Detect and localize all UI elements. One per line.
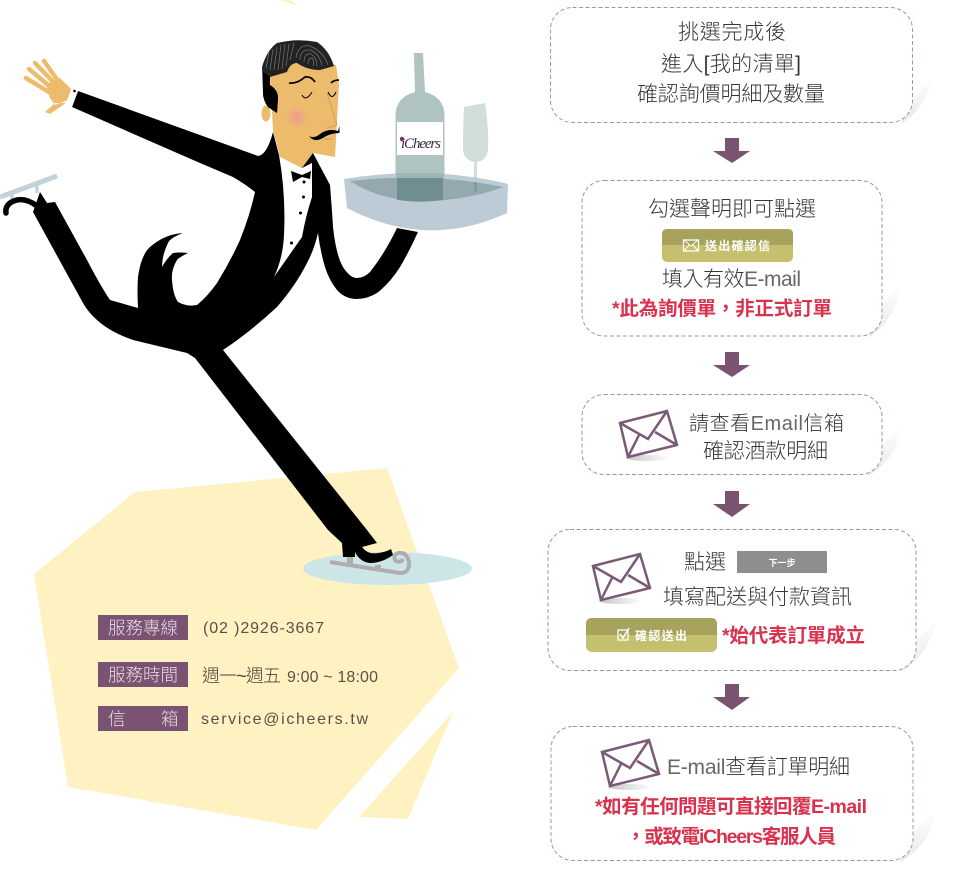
- contact: hotline: (02 )2926-3667: [203, 620, 324, 637]
- button: confirm and send: [586, 618, 717, 652]
- arrow 3: [713, 491, 750, 517]
- contact: hotline: 服務專線: [108, 618, 178, 638]
- panel 4: delivery and payment: [548, 530, 936, 672]
- button: send confirmation letter: [662, 229, 793, 262]
- contact: service hours: 服務時間: [108, 665, 178, 685]
- arrow 1: [713, 138, 750, 163]
- ice patch: [303, 552, 472, 585]
- panel 1: review list: 挑選完成後: [678, 21, 786, 44]
- bottle and glass behind tray: iCheers: [401, 136, 441, 152]
- panel 4: delivery and payment: 點選: [684, 551, 726, 574]
- button: send confirmation letter: 送出確認信: [705, 238, 770, 253]
- button: next step: [737, 551, 827, 573]
- panel 2: confirmation letter: 勾選聲明即可點選: [648, 198, 816, 221]
- button: confirm and send: 確認送出: [635, 628, 687, 643]
- hand and cuff: [26, 61, 78, 114]
- panel 5: order details: E-mail查看訂單明細: [667, 756, 850, 779]
- panel 3: check email: [582, 394, 902, 476]
- panel 5: order details: [551, 726, 936, 862]
- back skate: [0, 176, 57, 201]
- shirt: [274, 155, 312, 277]
- panel 4: delivery and payment: *始代表訂單成立: [722, 624, 865, 647]
- contact: email: 信: [108, 709, 126, 729]
- panel 3: check email: 請查看Email信箱: [689, 412, 844, 435]
- panel 1: review list: 確認詢價明細及數量: [637, 83, 825, 106]
- arrow 4: [713, 684, 750, 710]
- panel 5: order details: *如有任何問題可直接回覆E-mail: [595, 796, 867, 818]
- contact: service hours: [98, 662, 378, 687]
- contact: service hours: 9:00 ~ 18:00: [287, 669, 378, 686]
- bow tie and buttons: [290, 171, 311, 244]
- tray: [344, 173, 508, 230]
- button: next step: 下一步: [768, 557, 796, 568]
- icon: envelope: [593, 554, 650, 604]
- icon: envelope: [602, 740, 659, 790]
- contact: email: [98, 706, 368, 731]
- illustration: waiter on skates: [0, 40, 508, 573]
- panel 1: review list: 進入[我的清單]: [661, 53, 801, 76]
- bottle and glass behind tray: [396, 53, 488, 200]
- yellow background shape: [34, 0, 459, 830]
- front skate: [330, 553, 409, 573]
- panel 4: delivery and payment: 填寫配送與付款資訊: [663, 586, 852, 609]
- panel 2: confirmation letter: *此為詢價單，非正式訂單: [612, 297, 832, 320]
- panel 2: confirmation letter: 填入有效E-mail: [662, 268, 801, 291]
- contact: email: 箱: [161, 709, 178, 729]
- contact: hotline: [98, 615, 324, 640]
- panel 1: review list: [550, 8, 932, 124]
- back foot: [6, 200, 37, 213]
- panel 2: confirmation letter: [582, 180, 902, 338]
- head: [262, 40, 340, 168]
- panel 5: order details: ，或致電iCheers客服人員: [626, 825, 836, 848]
- icon: envelope: [620, 411, 677, 461]
- contact: email: service@icheers.tw: [201, 711, 368, 728]
- panel 3: check email: 確認酒款明細: [703, 440, 828, 463]
- tuxedo body: [33, 91, 418, 563]
- contact: service hours: 週一~週五: [202, 666, 281, 686]
- arrow 2: [713, 352, 750, 377]
